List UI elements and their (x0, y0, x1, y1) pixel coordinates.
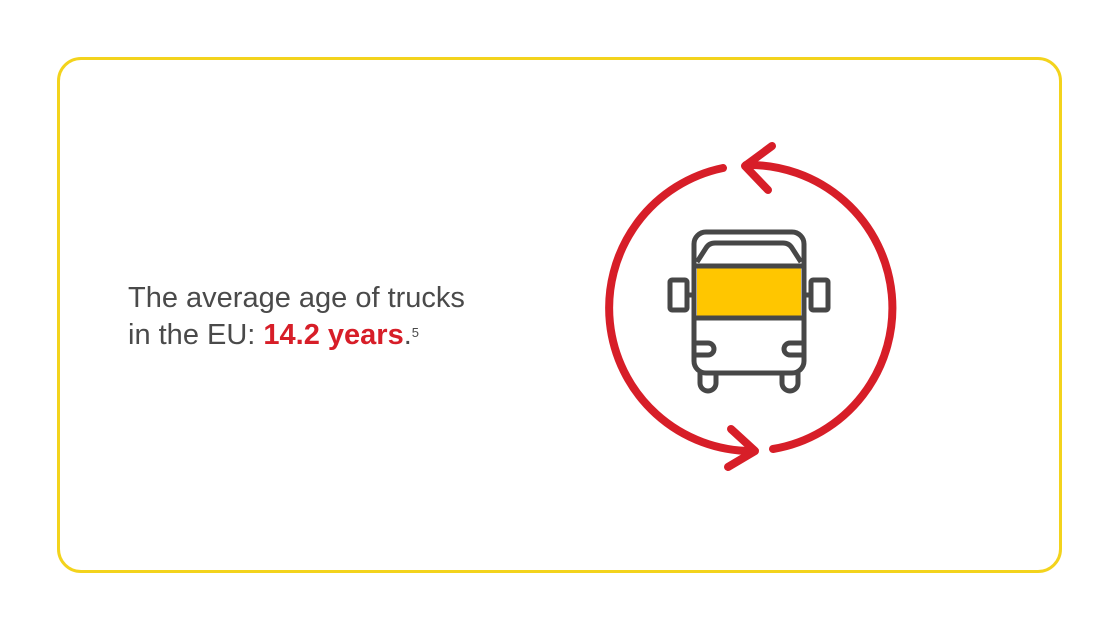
panel: yellow frame (57, 57, 1062, 573)
text block: statistic: in the EU: 14.2 years.5 (128, 319, 419, 351)
text block: statistic: The average age of trucks (128, 282, 465, 314)
icon: cycle arrows (609, 146, 892, 467)
icon: truck (670, 232, 828, 391)
text block: statistic (128, 282, 465, 351)
